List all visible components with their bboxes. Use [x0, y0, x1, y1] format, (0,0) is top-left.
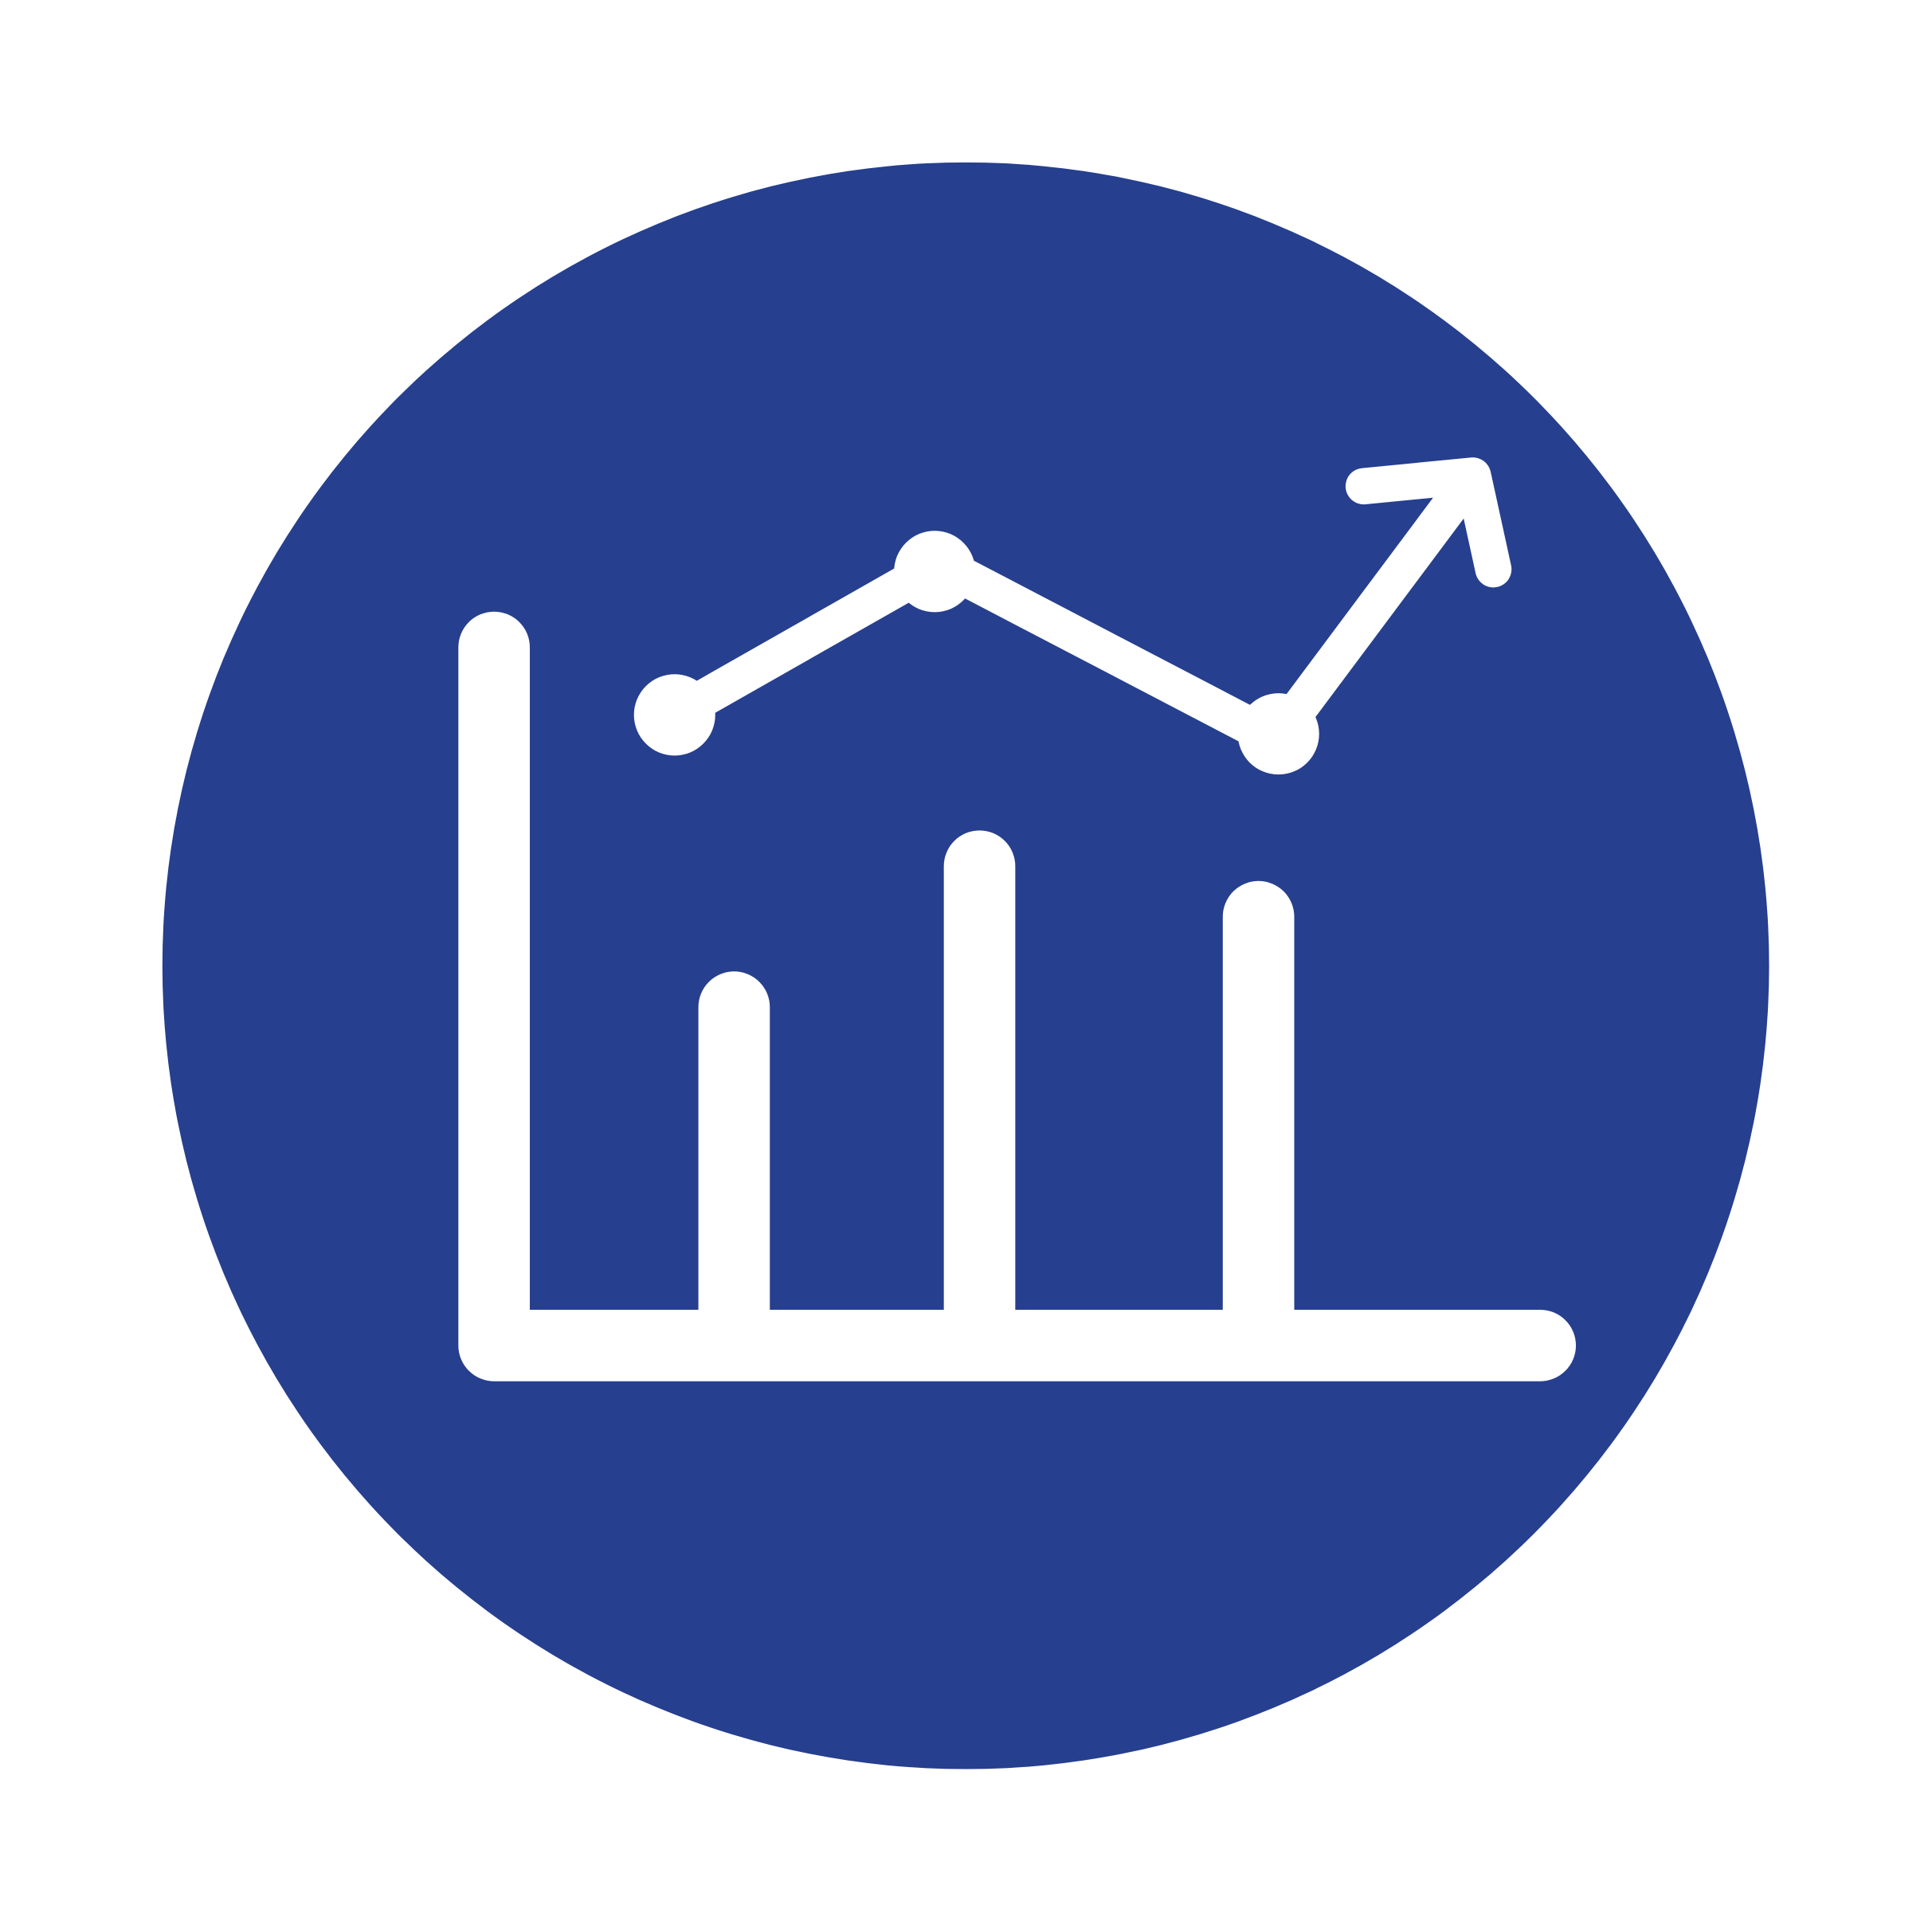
data point 2: [894, 531, 975, 612]
arrow head: [1364, 476, 1493, 570]
trend line segment falling: [935, 562, 1279, 741]
data point 3: [1238, 693, 1319, 774]
data point 1: [634, 674, 715, 755]
trend line segment rising: [675, 566, 935, 715]
bar 2: [944, 830, 1015, 1346]
bar chart: [494, 648, 1540, 1346]
line chart with arrow: [634, 476, 1493, 774]
bar 3: [1223, 881, 1295, 1346]
chart axes: [494, 648, 1540, 1346]
bar 1: [699, 971, 770, 1346]
arrow shaft: [1279, 480, 1469, 735]
panel: blue circle background: [163, 163, 1769, 1769]
